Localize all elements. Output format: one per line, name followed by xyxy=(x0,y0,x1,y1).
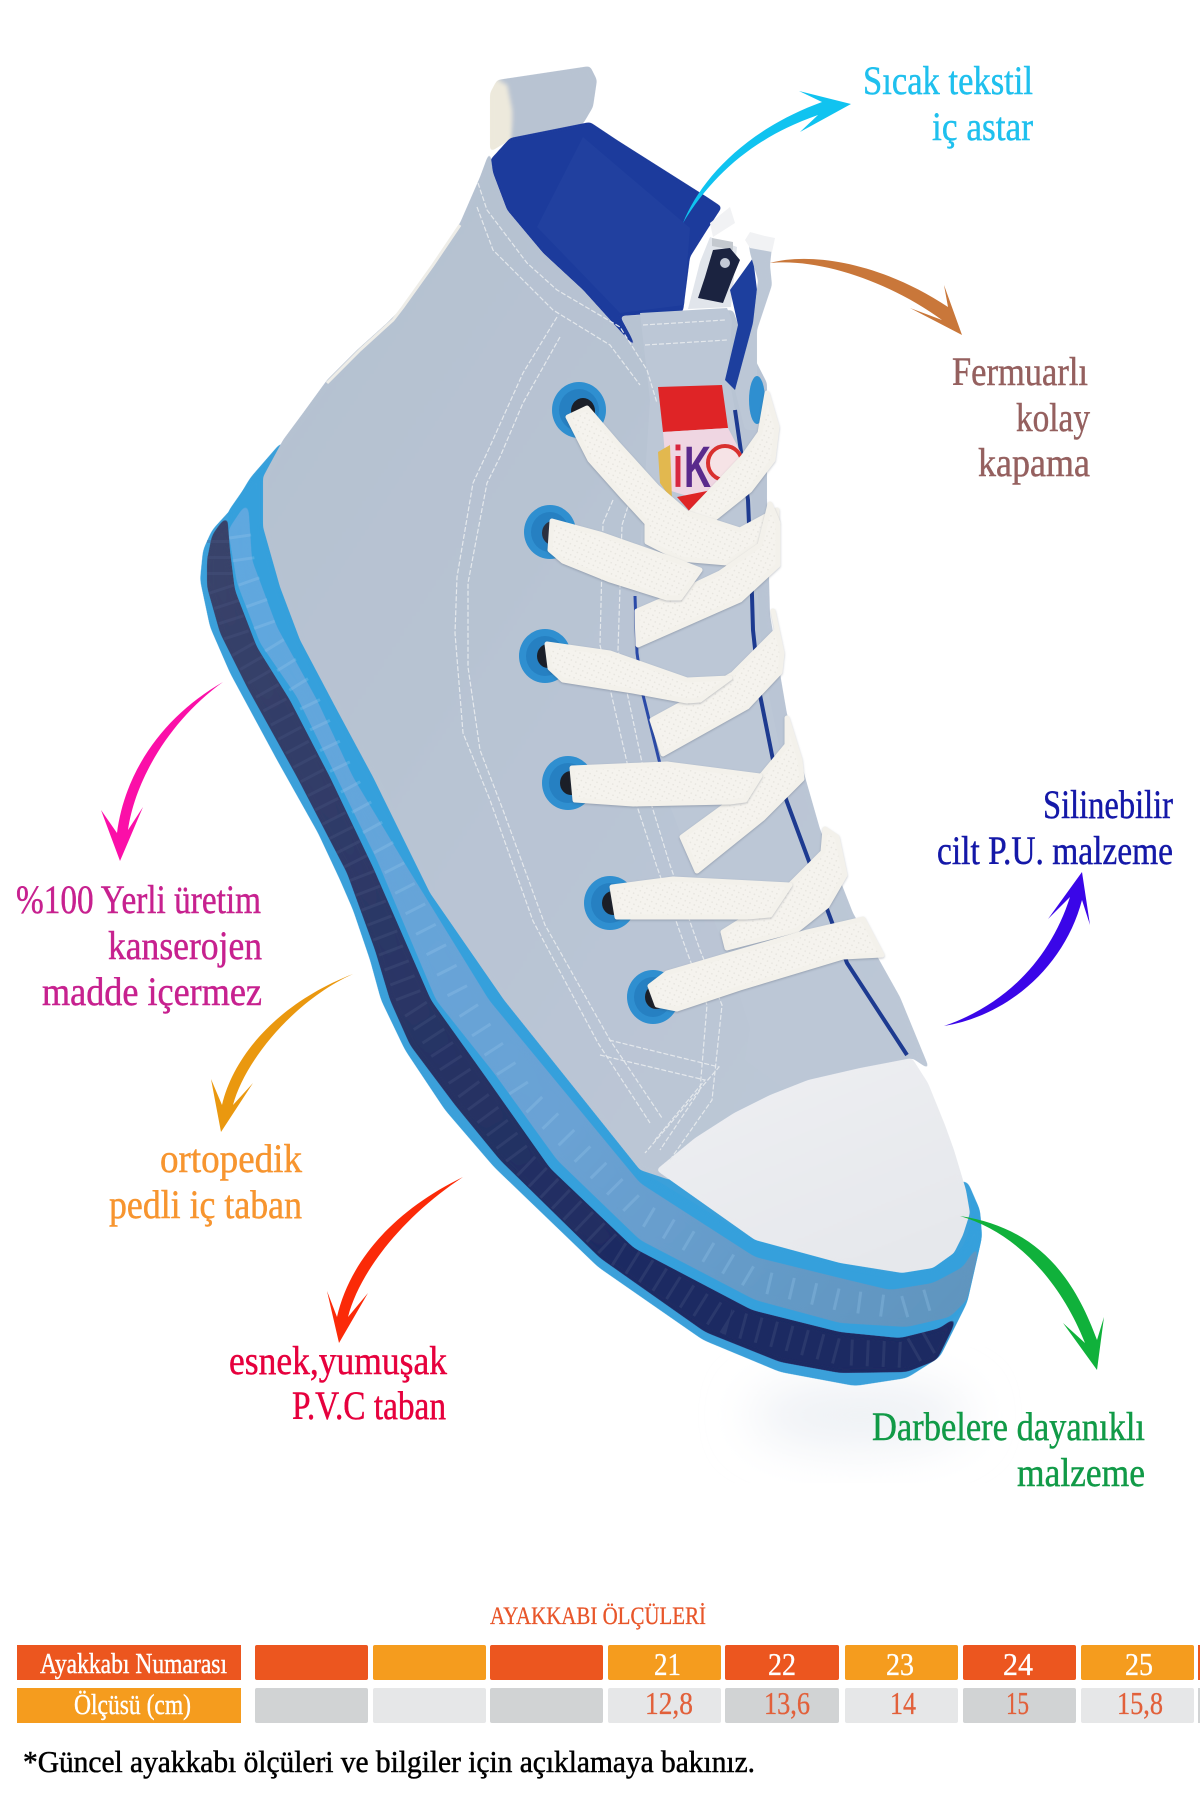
label: local production: %100 Yerli üretim xyxy=(16,877,261,922)
label: impact resistant xyxy=(872,1404,1145,1495)
size number row: 23 xyxy=(886,1646,914,1682)
label: PVC sole: esnek,yumuşak xyxy=(229,1338,447,1383)
stitching xyxy=(455,183,727,1160)
label: warm textile lining: iç astar xyxy=(932,104,1033,149)
zipper top fray xyxy=(710,207,735,237)
row header: measure xyxy=(17,1688,241,1723)
brand label: i xyxy=(673,435,683,500)
arrow: orange xyxy=(211,974,353,1132)
sole: outer trim xyxy=(200,440,982,1386)
shoelaces xyxy=(547,393,882,1009)
toe cap xyxy=(656,1058,970,1273)
measurement row: 12,8 xyxy=(645,1685,693,1721)
label: warm textile lining xyxy=(863,58,1033,149)
label: impact resistant: Darbelere dayanıklı xyxy=(872,1404,1145,1449)
side blue piping xyxy=(735,410,907,1055)
label: orthopedic insole: pedli iç taban xyxy=(109,1182,302,1227)
measurement row: 13,6 xyxy=(764,1685,810,1721)
arrow: red xyxy=(327,1177,463,1343)
brand label xyxy=(658,385,750,514)
arrow: pink xyxy=(101,682,223,861)
arrow: green xyxy=(960,1216,1104,1370)
tongue xyxy=(637,308,905,1100)
left blue piping xyxy=(635,596,660,764)
size table xyxy=(17,1645,1200,1723)
label: impact resistant: malzeme xyxy=(1017,1450,1145,1495)
label: zipper closure xyxy=(952,349,1090,485)
label: zipper closure: Fermuarlı xyxy=(952,349,1088,394)
tread texture xyxy=(220,540,935,1355)
row header: shoe number: Ayakkabı Numarası xyxy=(40,1649,227,1680)
lining inner panel xyxy=(537,137,690,313)
row header: measure: Ölçüsü (cm) xyxy=(74,1690,191,1721)
label: wipeable PU: Silinebilir xyxy=(1043,782,1173,827)
sole: bright rim and stripe xyxy=(227,440,982,1338)
flap frayed top xyxy=(745,232,775,252)
heel pull tab xyxy=(490,66,597,152)
arrow: cyan to textile lining xyxy=(683,91,851,223)
label: local production: kanserojen xyxy=(108,923,262,968)
shoe photo illustration xyxy=(200,66,982,1449)
size number row: 21 xyxy=(654,1646,681,1682)
brand label: K xyxy=(684,435,711,500)
right zipper flap xyxy=(735,238,773,430)
eyelets xyxy=(519,376,765,1024)
label: orthopedic insole xyxy=(109,1136,302,1227)
sole: navy tread xyxy=(207,513,960,1373)
zipper pull xyxy=(698,248,740,303)
zipper slider xyxy=(712,238,733,250)
label: zipper closure: kapama xyxy=(978,440,1090,485)
size number row: 25 xyxy=(1125,1646,1153,1682)
measurement row: 15,8 xyxy=(1117,1685,1163,1721)
heel white seam xyxy=(327,225,460,383)
blue flap lining xyxy=(725,258,757,390)
label: PVC sole: P.V.C taban xyxy=(292,1383,446,1428)
label: PVC sole xyxy=(229,1338,447,1428)
label: wipeable PU xyxy=(937,782,1173,873)
label: orthopedic insole: ortopedik xyxy=(160,1136,302,1181)
sole: translucent band xyxy=(228,500,982,1327)
ground shadow xyxy=(750,1381,970,1449)
label: local production: madde içermez xyxy=(42,969,262,1014)
band ribs xyxy=(240,535,945,1308)
label: warm textile lining: Sıcak tekstil xyxy=(863,58,1033,103)
measurement row: 15 xyxy=(1006,1685,1029,1721)
size number row xyxy=(255,1645,1200,1682)
measurement row xyxy=(255,1685,1200,1723)
zipper tape xyxy=(688,237,737,309)
footnote: *Güncel ayakkabı ölçüleri ve bilgiler için açıklamaya bakınız. xyxy=(23,1744,755,1779)
label: zipper closure: kolay xyxy=(1016,395,1090,440)
arrow: purple xyxy=(944,872,1090,1026)
leather upper xyxy=(263,150,930,1180)
size table title: AYAKKABI ÖLÇÜLERİ xyxy=(490,1603,706,1630)
label: local production xyxy=(16,877,262,1014)
size number row: 22 xyxy=(768,1646,796,1682)
arrow: brown to zipper xyxy=(770,259,962,335)
size number row: 24 xyxy=(1003,1646,1033,1682)
lining blue xyxy=(490,122,722,353)
measurement row: 14 xyxy=(890,1685,916,1721)
